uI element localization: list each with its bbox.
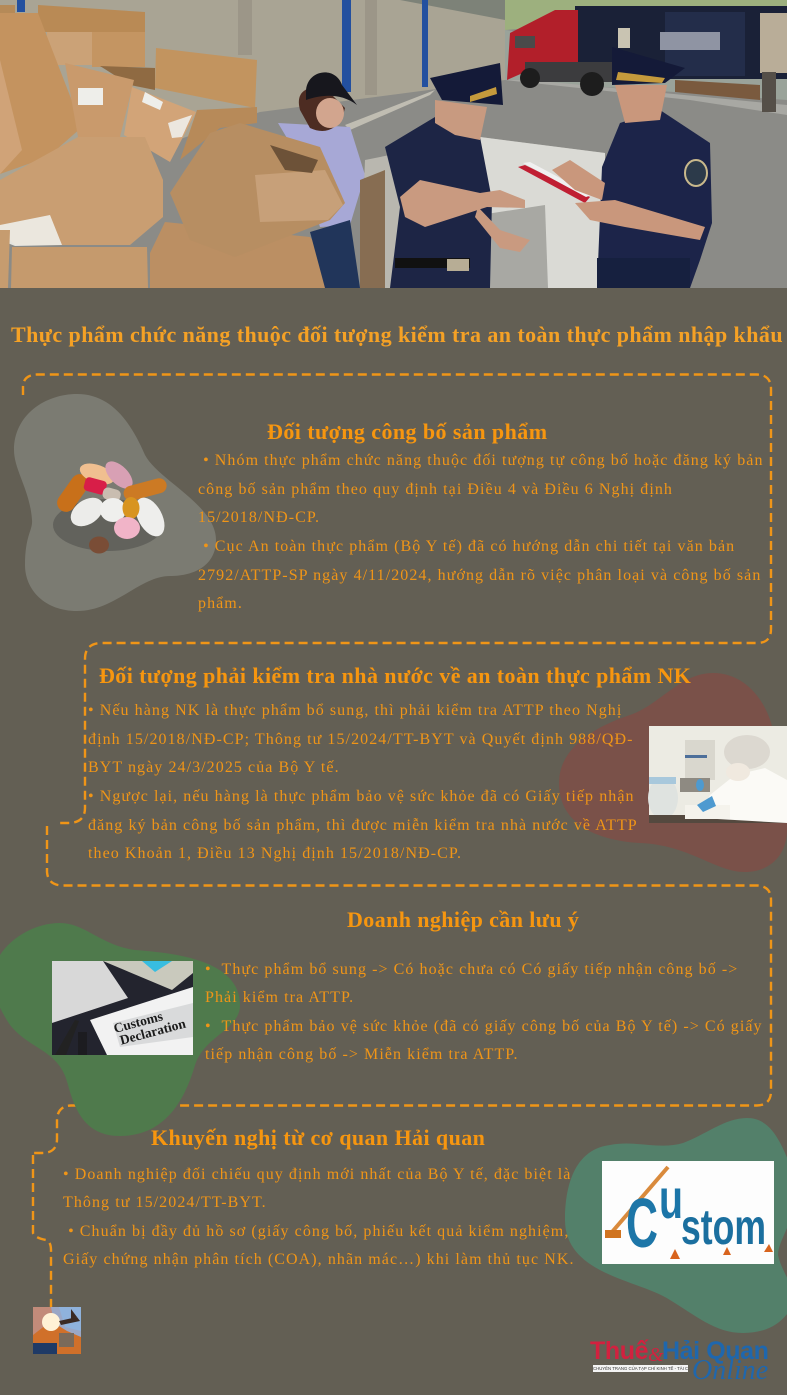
- text block: công bố sản phẩm theo quy định tại Điều 4 và Điều 6 Nghị định: [198, 481, 673, 498]
- text block: • Nếu hàng NK là thực phẩm bổ sung, thì phải kiểm tra ATTP theo Nghị: [88, 702, 622, 719]
- text block: • Ngược lại, nếu hàng là thực phẩm bảo vệ sức khỏe đã có Giấy tiếp nhận: [88, 788, 635, 805]
- text block: phẩm.: [198, 595, 243, 612]
- text block: [88, 702, 638, 862]
- heading: Đối tượng công bố sản phẩm: [267, 419, 547, 444]
- teal blob with custom photo: [565, 1118, 787, 1333]
- text block: • Nhóm thực phẩm chức năng thuộc đối tượng tự công bố hoặc đăng ký bản: [203, 452, 764, 469]
- green blob with customs declaration photo: Customs: [112, 1008, 164, 1036]
- green blob with customs declaration photo: Declaration: [118, 1016, 188, 1048]
- text block: Phải kiểm tra ATTP.: [205, 989, 354, 1006]
- panel: product declaration: [14, 394, 764, 612]
- logo: Thuế & Hải Quan Online: Online: [692, 1355, 768, 1386]
- icon: airplane and containers photo: [33, 1307, 81, 1354]
- text block: [205, 961, 763, 1063]
- logo: Thuế & Hải Quan Online: Hải Quan: [662, 1337, 769, 1365]
- heading: Đối tượng phải kiểm tra nhà nước về an toàn thực phẩm NK: [99, 663, 691, 688]
- logo: Thuế & Hải Quan Online: &: [648, 1344, 664, 1366]
- blob with pills icon: [14, 394, 216, 611]
- hero photo: customs officers inspecting boxes: [0, 0, 787, 288]
- text block: • Thực phẩm bảo vệ sức khỏe (đã có giấy công bố của Bộ Y tế) -> Có giấy: [205, 1018, 763, 1035]
- text block: • Chuẩn bị đầy đủ hồ sơ (giấy công bố, phiếu kết quả kiểm nghiệm,: [68, 1223, 569, 1240]
- panel: business notes: [0, 907, 763, 1136]
- text block: 2792/ATTP-SP ngày 4/11/2024, hướng dẫn rõ việc phân loại và công bố sản: [198, 567, 761, 584]
- text block: Giấy chứng nhận phân tích (COA), nhãn mác…) khi làm thủ tục NK.: [63, 1251, 575, 1268]
- text block: tiếp nhận công bố -> Miễn kiểm tra ATTP.: [205, 1046, 519, 1063]
- teal blob with custom photo: u: [659, 1167, 683, 1230]
- text block: • Thực phẩm bổ sung -> Có hoặc chưa có Có giấy tiếp nhận công bố ->: [205, 961, 738, 978]
- text block: [63, 1166, 575, 1268]
- logo: Thuế & Hải Quan Online: [590, 1337, 769, 1386]
- teal blob with custom photo: C: [626, 1184, 658, 1262]
- text block: • Doanh nghiệp đối chiếu quy định mới nhất của Bộ Y tế, đặc biệt là: [63, 1166, 571, 1183]
- text block: đăng ký bản công bố sản phẩm, thì được miễn kiểm tra nhà nước về ATTP: [88, 817, 638, 834]
- brown blob with lab photo: [559, 673, 787, 872]
- green blob with customs declaration photo: [0, 923, 240, 1136]
- text block: theo Khoản 1, Điều 13 Nghị định 15/2018/NĐ-CP.: [88, 845, 462, 862]
- heading: Doanh nghiệp cần lưu ý: [347, 907, 579, 932]
- text block: BYT ngày 24/3/2025 của Bộ Y tế.: [88, 759, 340, 776]
- text block: Thông tư 15/2024/TT-BYT.: [63, 1194, 267, 1211]
- text block: định 15/2018/NĐ-CP; Thông tư 15/2024/TT-BYT và Quyết định 988/QĐ-: [88, 731, 633, 748]
- title: Thực phẩm chức năng thuộc đối tượng kiểm tra an toàn thực phẩm nhập khẩu: [11, 322, 783, 347]
- panel: subjects of state inspection: [88, 663, 787, 872]
- heading: Khuyến nghị từ cơ quan Hải quan: [151, 1125, 485, 1150]
- text block: 15/2018/NĐ-CP.: [198, 509, 320, 526]
- panel: customs recommendations: [63, 1118, 787, 1333]
- logo: Thuế & Hải Quan Online: Thuế: [590, 1337, 648, 1365]
- text block: [198, 452, 764, 612]
- text block: • Cục An toàn thực phẩm (Bộ Y tế) đã có hướng dẫn chi tiết tại văn bản: [203, 538, 735, 555]
